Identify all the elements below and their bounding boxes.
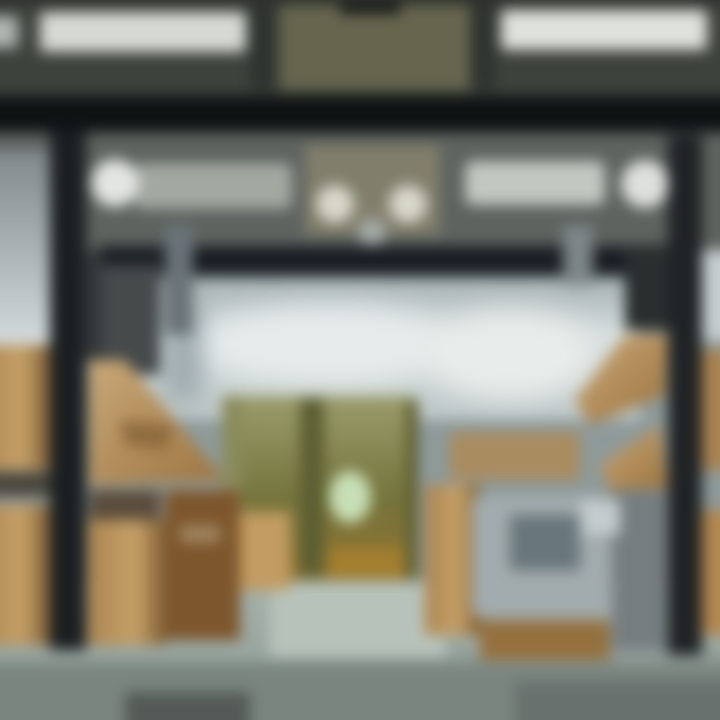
green door [222,396,418,582]
roof beam: upper [0,96,720,132]
machine: grey forklift [472,490,667,650]
ceiling lights: upper row [0,10,707,52]
back wall [120,280,640,420]
ceiling lights: middle row [91,159,669,246]
ceiling: upper section [0,0,720,100]
boxes: left stack [0,345,290,645]
boxes: right stack [425,335,720,660]
steel pillars [50,130,702,655]
roof beam: lower [100,225,675,375]
ceiling: middle section [0,125,720,350]
floor [0,580,720,720]
